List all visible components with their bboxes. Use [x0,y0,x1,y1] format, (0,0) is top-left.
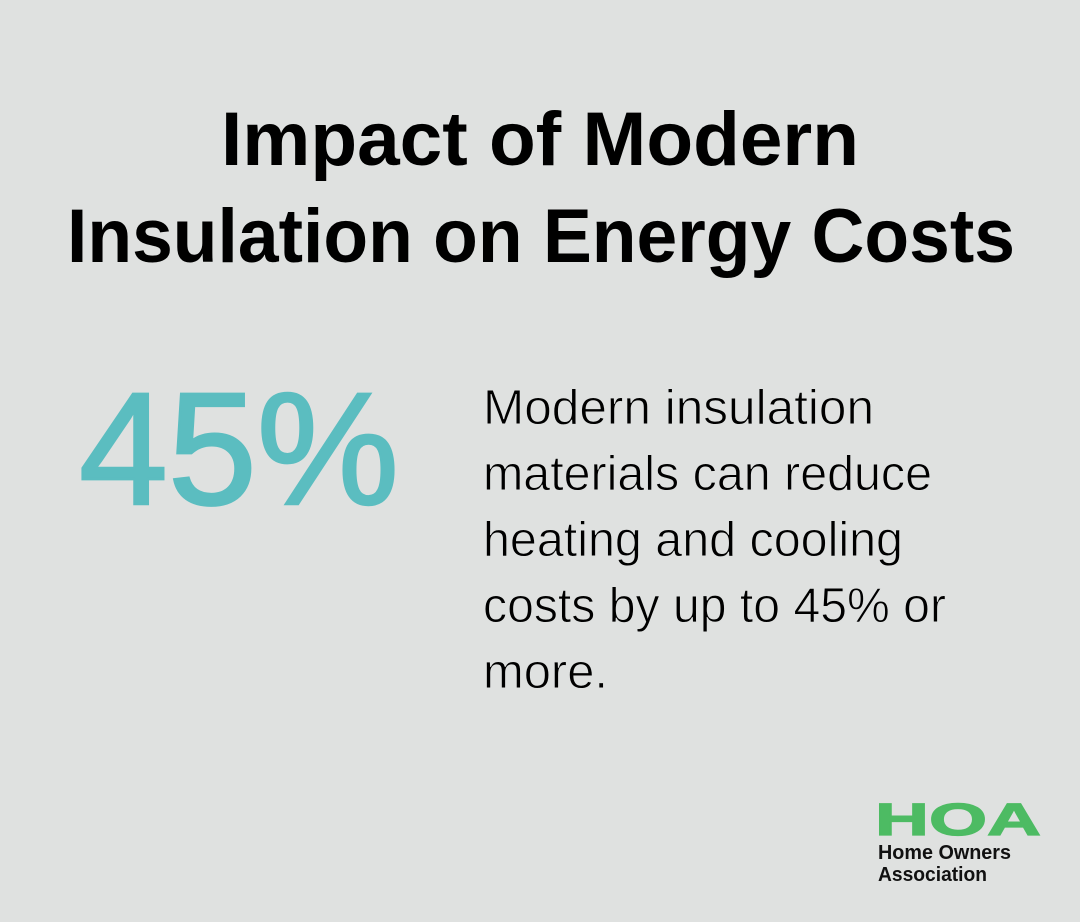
description text: Modern insulation [483,381,874,435]
description text: materials can reduce [483,447,932,501]
description text: more. [483,645,608,699]
logo: HOA Home Owners Association [875,794,1041,886]
title [67,97,1015,279]
big statistic: 45%: 45% [79,359,399,538]
description text [483,381,946,699]
logo wordmark: HOA [875,794,1041,845]
description text: costs by up to 45% or [483,579,946,633]
description text: heating and cooling [483,513,903,567]
title: Impact of Modern [221,97,859,182]
logo subtitle: Association [878,864,987,886]
logo subtitle: Home Owners [878,842,1011,864]
title: Insulation on Energy Costs [67,194,1015,279]
logo subtitle [878,842,1011,886]
